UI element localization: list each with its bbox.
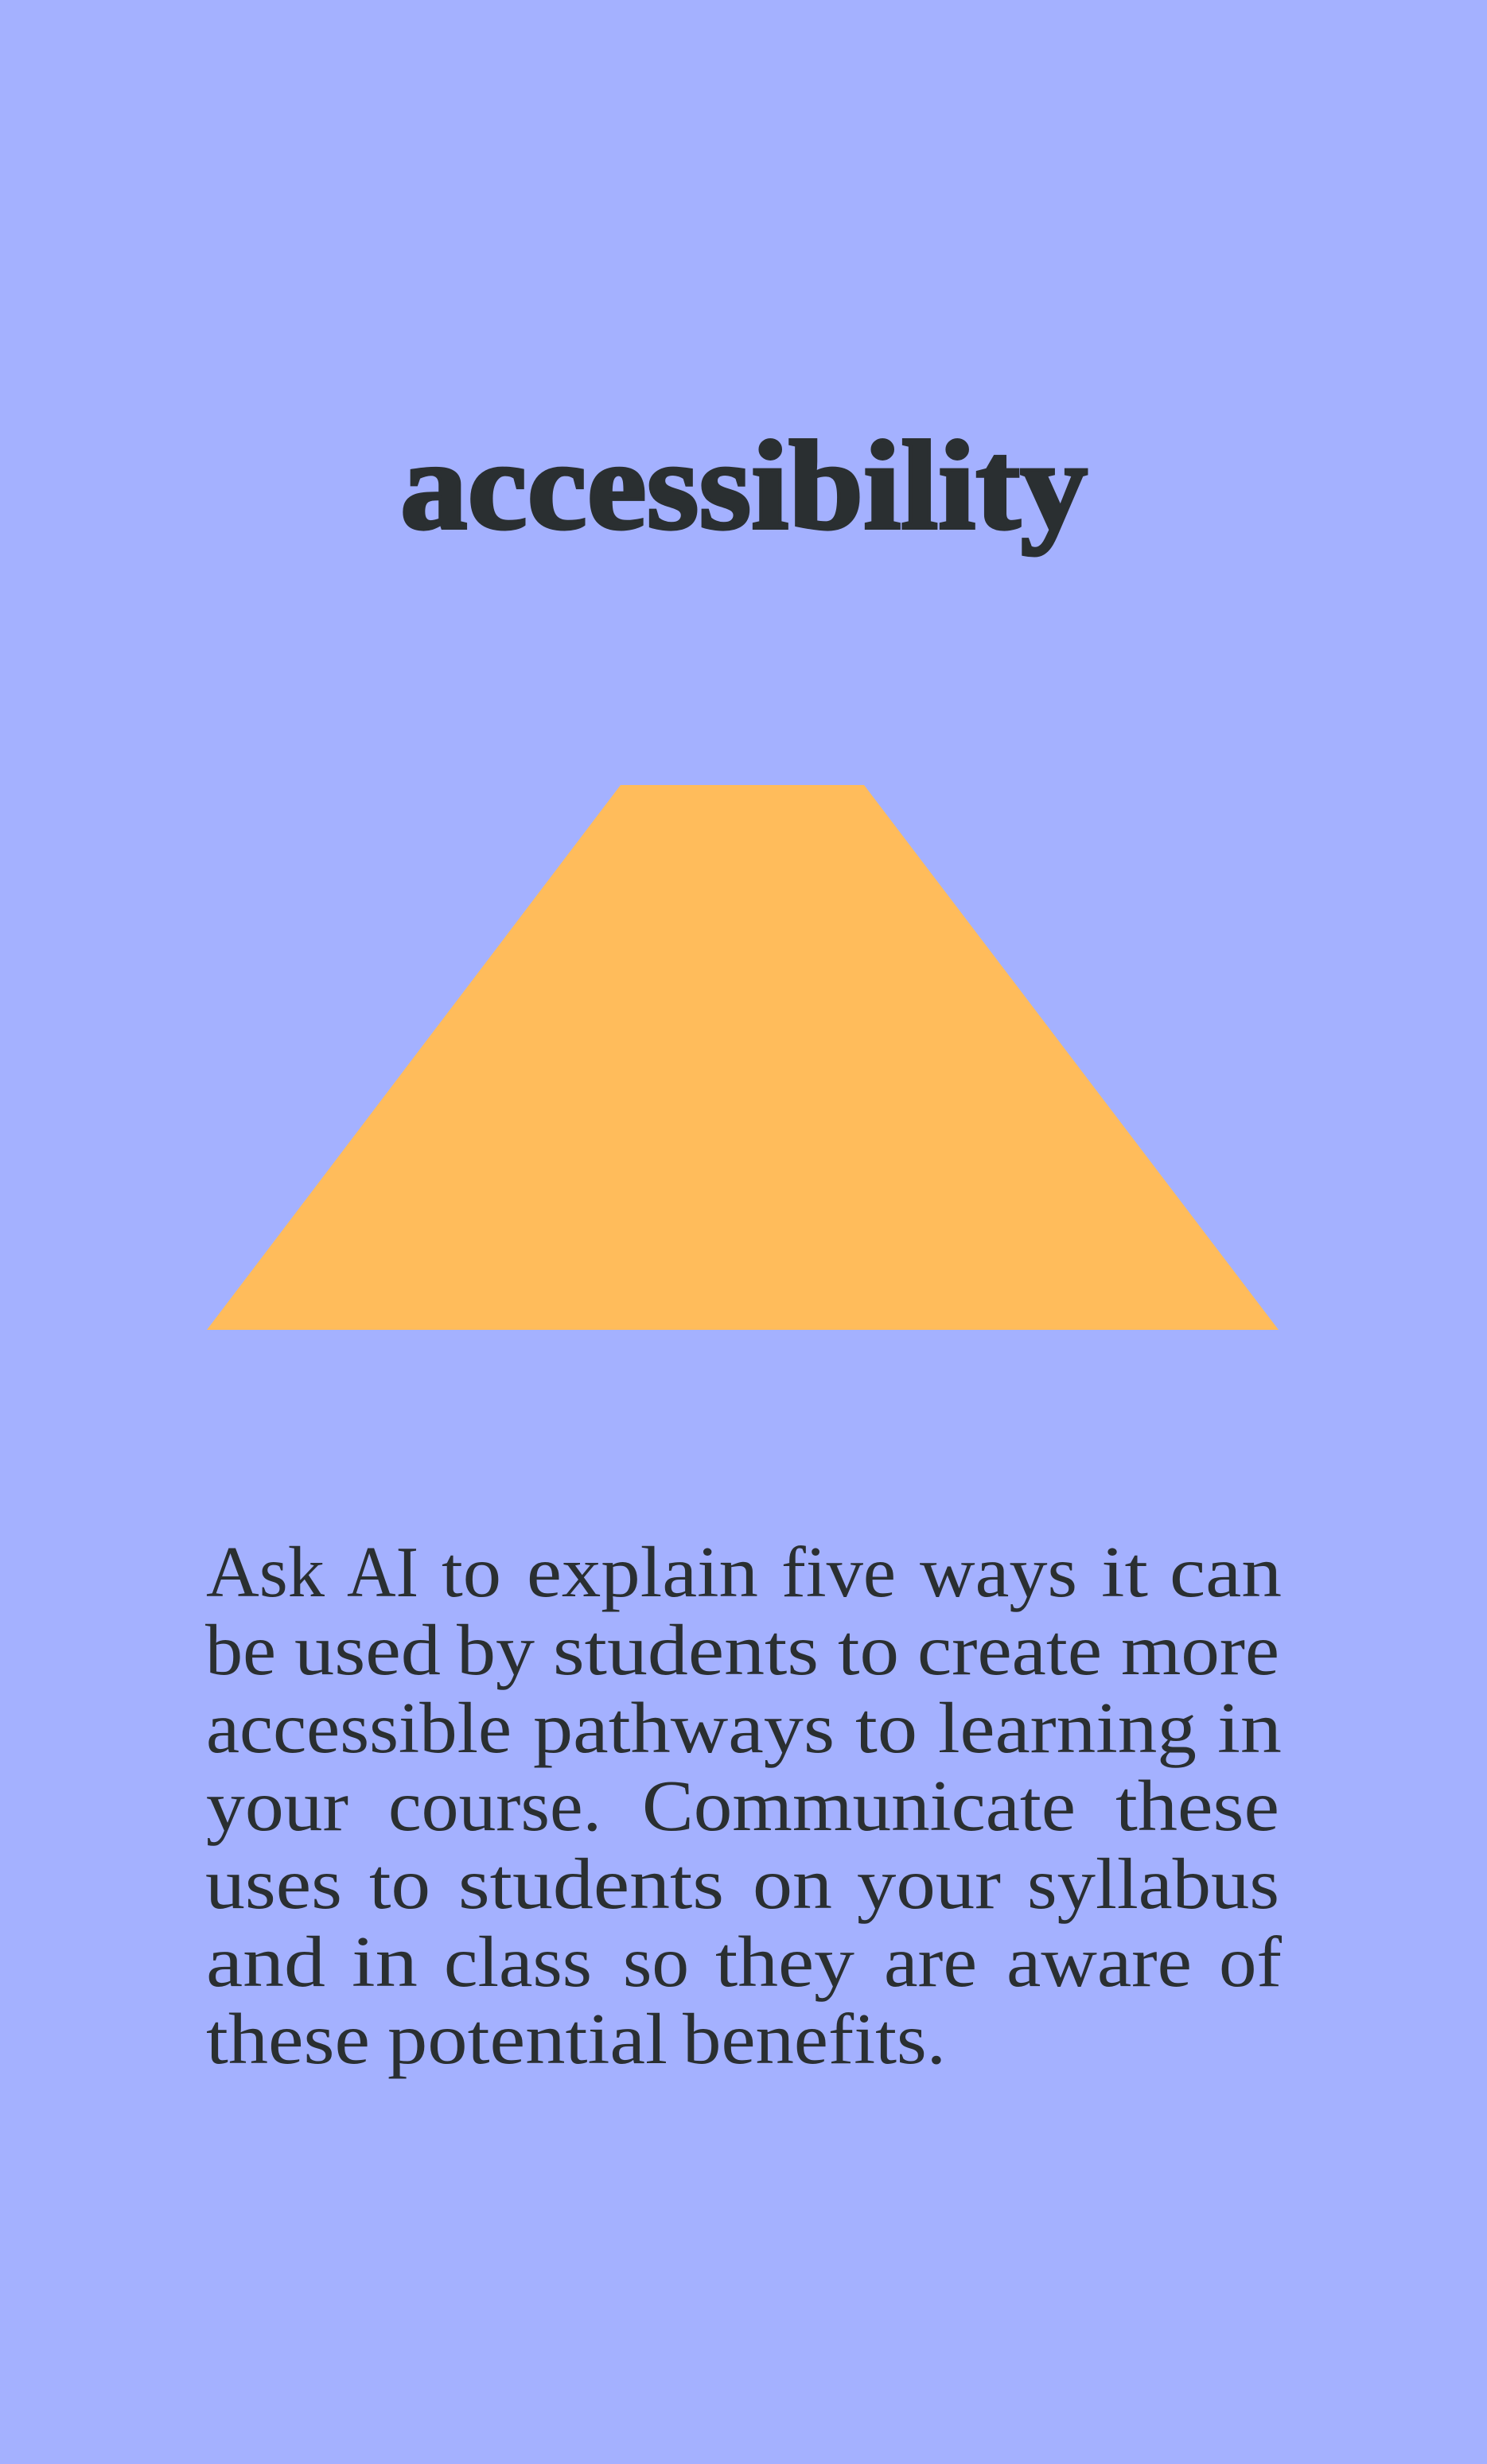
text block: description: these [1115,1766,1279,1846]
text block: description: potential [387,1999,668,2079]
text block: description: five [781,1532,896,1612]
text block: description: and [206,1922,325,2002]
text block: description: these [206,1999,370,2079]
text block: description: more [1121,1610,1279,1690]
text block: description: uses [205,1844,342,1924]
text block: description: used [294,1610,441,1690]
text block: description: your [857,1844,1001,1924]
text block: description: ways [920,1532,1077,1612]
text block: description: are [884,1922,977,2002]
text block: description: it [1101,1532,1148,1612]
text block: description: to [855,1688,917,1768]
text block: description: pathways [533,1688,835,1768]
text block: description: benefits. [683,1999,946,2079]
text block: description: on [753,1844,832,1924]
text block: description: to [838,1610,899,1690]
text block: description: students [553,1610,819,1690]
text block: description: in [1217,1688,1282,1768]
text block: description: course. [388,1766,601,1846]
text block: description: class [444,1922,592,2002]
text block: description: Ask [206,1532,325,1612]
text block: description: by [457,1610,535,1690]
text block: description: Communicate [642,1766,1076,1846]
text block: description: AI [347,1532,418,1612]
text block: description: your [206,1766,348,1846]
title: accessibility [400,414,1088,556]
text block: description: to [442,1532,501,1612]
text block: description: of [1219,1922,1283,2002]
text block: description: create [917,1610,1102,1690]
text block: description: syllabus [1027,1844,1279,1924]
text block: description: they [715,1922,855,2002]
text block: description: learning [938,1688,1197,1768]
text block: description [205,1532,1283,2079]
text block: description: so [623,1922,689,2002]
text block: description: students [458,1844,724,1924]
text block: description: to [369,1844,430,1924]
text block: description: be [205,1610,276,1690]
text block: description: can [1170,1532,1282,1612]
text block: description: in [352,1922,418,2002]
text block: description: explain [527,1532,758,1612]
icon: orange trapezoid [207,785,1279,1330]
text block: description: accessible [206,1688,512,1768]
text block: description: aware [1006,1922,1192,2002]
